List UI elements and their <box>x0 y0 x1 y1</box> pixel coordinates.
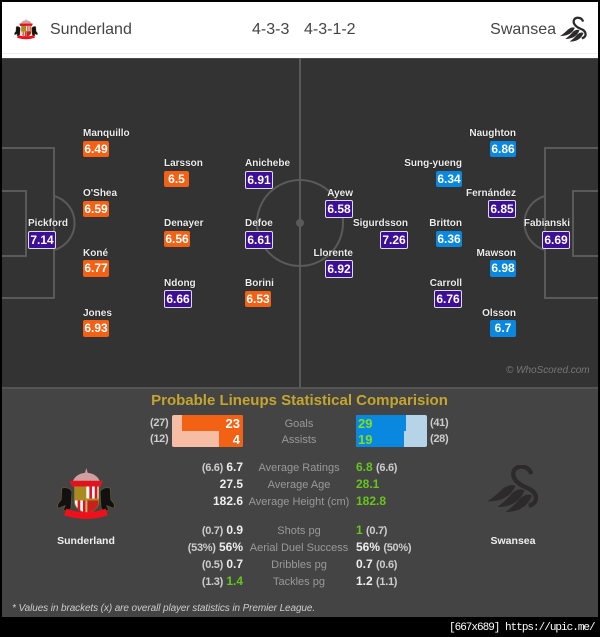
player: Ayew: 6.58 <box>327 202 351 216</box>
stat: aerial duel success: 56% (50%) <box>356 540 411 554</box>
stat: average ratings <box>202 460 397 474</box>
stat: shots per game: 1 (0.7) <box>356 523 387 537</box>
label: Swansea team: Swansea <box>491 535 535 547</box>
player: Llorente: Llorente <box>314 248 353 259</box>
stat: average age <box>220 477 379 491</box>
player: Fabianski: 6.69 <box>544 233 568 247</box>
player: Defoe <box>245 218 273 249</box>
player: Britton: 6.36 <box>437 232 461 246</box>
stat: dribbles per game: 0.7 (0.6) <box>356 557 397 571</box>
bar chart: Sunderland goals and assists: 23 <box>226 416 240 431</box>
player: Fabianski <box>524 218 570 249</box>
stat: dribbles per game: Dribbles pg <box>271 559 327 571</box>
header bar <box>2 2 598 58</box>
icon: Swansea crest small <box>560 16 587 42</box>
label: Sunderland team: Sunderland <box>57 535 115 547</box>
footnote: * Values in brackets (x) are overall player statistics in Premier League. <box>12 603 315 614</box>
player: Olsson: 6.7 <box>495 321 511 335</box>
player: Sigurdsson: 7.26 <box>382 233 406 247</box>
stat: tackles per game: (1.3) 1.4 <box>202 574 243 588</box>
stat bracket: left goals: (27) <box>150 417 168 429</box>
stat: tackles per game <box>202 574 397 588</box>
player: Sigurdsson: Sigurdsson <box>353 218 408 229</box>
player: Larsson: Larsson <box>164 158 203 169</box>
player: Jones <box>83 308 112 337</box>
player: Ayew <box>325 188 354 218</box>
player: Jones: Jones <box>83 308 112 319</box>
player: Manquillo <box>83 128 130 157</box>
player: Larsson: 6.5 <box>168 172 185 186</box>
player: Fernández: 6.85 <box>490 202 514 216</box>
player: Britton <box>429 218 462 247</box>
player: Manquillo: 6.49 <box>84 142 108 156</box>
stat: average height: 182.6 <box>213 494 243 508</box>
stat: tackles per game: Tackles pg <box>273 576 325 588</box>
player: Sung-yueng: 6.34 <box>437 172 461 186</box>
stat: shots per game <box>202 523 387 537</box>
player: Koné: 6.77 <box>84 261 108 275</box>
label: Goals: Goals <box>285 418 313 430</box>
player: Larsson <box>164 158 203 187</box>
player: Manquillo: Manquillo <box>83 128 130 139</box>
stat: average ratings: 6.8 (6.6) <box>356 460 397 474</box>
player: Anichebe: 6.91 <box>247 173 271 187</box>
player: O'Shea: O'Shea <box>83 188 117 199</box>
label: Assists: Assists <box>282 434 316 446</box>
title: Probable Lineups Statistical Comparision <box>151 392 448 409</box>
icon: Swansea crest large <box>488 465 538 512</box>
player: Anichebe: Anichebe <box>245 158 290 169</box>
heading: formations <box>252 21 356 38</box>
player: Naughton <box>469 128 516 157</box>
player: Fabianski: Fabianski <box>524 218 570 229</box>
player: Borini <box>245 278 274 307</box>
player: Ayew: Ayew <box>327 188 353 199</box>
stat: average ratings: (6.6) 6.7 <box>202 460 243 474</box>
player: Pickford: 7.14 <box>30 233 54 247</box>
panel: stats comparison <box>2 389 598 617</box>
stat bracket: left assists: (12) <box>150 433 168 445</box>
player: Mawson: Mawson <box>477 248 516 259</box>
stat: average ratings: Average Ratings <box>258 462 340 474</box>
icon: Sunderland crest small <box>14 18 38 40</box>
heading: formations: 4-3-3 <box>252 21 289 38</box>
player: Ndong: Ndong <box>164 278 196 289</box>
stat: average age: 27.5 <box>220 477 243 491</box>
player: Britton: Britton <box>429 218 462 229</box>
player: Pickford: Pickford <box>28 218 68 229</box>
stat: shots per game: Shots pg <box>277 525 321 537</box>
player: Sung-yueng <box>404 158 462 187</box>
stat bracket: right assists: (28) <box>430 433 448 445</box>
stat: average height: Average Height (cm) <box>249 496 349 508</box>
player: Denayer <box>164 218 204 247</box>
player: Denayer: 6.56 <box>165 232 189 246</box>
player: Denayer: Denayer <box>164 218 203 229</box>
player: Fernández: Fernández <box>466 188 516 199</box>
bar chart: Sunderland goals and assists <box>172 415 243 447</box>
player: Mawson <box>476 248 516 277</box>
heading: formations: 4-3-1-2 <box>304 21 356 38</box>
player: Ndong: 6.66 <box>166 292 190 306</box>
player: Mawson: 6.98 <box>491 261 515 275</box>
player: O'Shea <box>83 188 118 217</box>
bar chart: Sunderland goals and assists: 4 <box>233 432 240 447</box>
stat: aerial duel success: (53%) 56% <box>188 540 243 554</box>
stat: shots per game: (0.7) 0.9 <box>202 523 243 537</box>
stat: tackles per game: 1.2 (1.1) <box>356 574 397 588</box>
stat: average age: Average Age <box>268 479 330 491</box>
player: Llorente <box>314 248 353 278</box>
stat bracket: right goals: (41) <box>430 417 448 429</box>
heading: Swansea: Swansea <box>490 21 556 38</box>
player: Carroll: Carroll <box>430 278 462 289</box>
stat: average age: 28.1 <box>356 477 379 491</box>
player: Ndong <box>164 278 196 308</box>
player: Pickford <box>28 218 68 249</box>
watermark: WhoScored: © WhoScored.com <box>506 365 590 376</box>
bar chart: Swansea goals and assists <box>356 415 427 447</box>
stat: average height <box>213 494 386 508</box>
bar chart: Swansea goals and assists: 19 <box>358 432 372 447</box>
player: Borini: 6.53 <box>246 292 270 306</box>
player: Naughton: Naughton <box>469 128 516 139</box>
bar chart: Swansea goals and assists: 29 <box>358 416 372 431</box>
player: Naughton: 6.86 <box>491 142 515 156</box>
player: Llorente: 6.92 <box>327 262 351 276</box>
icon: Sunderland crest large <box>57 468 115 519</box>
heading: Sunderland: Sunderland <box>50 21 132 38</box>
player: Carroll: 6.76 <box>436 292 460 306</box>
player: Fernández <box>466 188 516 218</box>
player: Olsson: Olsson <box>482 308 516 319</box>
player: Anichebe <box>245 158 290 189</box>
player: Jones: 6.93 <box>84 321 108 335</box>
stat: aerial duel success <box>188 540 411 554</box>
panel: pitch <box>2 58 598 389</box>
player: Defoe: Defoe <box>245 218 273 229</box>
image size watermark: [667x689] https://upic.me/ <box>449 622 595 634</box>
stat: dribbles per game: (0.5) 0.7 <box>202 557 243 571</box>
player: Olsson <box>482 308 516 337</box>
player: Borini: Borini <box>245 278 274 289</box>
stat: aerial duel success: Aerial Duel Success <box>250 542 348 554</box>
player: Sigurdsson <box>353 218 408 249</box>
player: Koné <box>83 248 109 277</box>
player: Carroll <box>430 278 462 308</box>
stat: average height: 182.8 <box>356 494 386 508</box>
player: Defoe: 6.61 <box>247 233 271 247</box>
player: Sung-yueng: Sung-yueng <box>404 158 462 169</box>
player: Koné: Koné <box>83 248 108 259</box>
player: O'Shea: 6.59 <box>84 202 108 216</box>
stat: dribbles per game <box>202 557 397 571</box>
